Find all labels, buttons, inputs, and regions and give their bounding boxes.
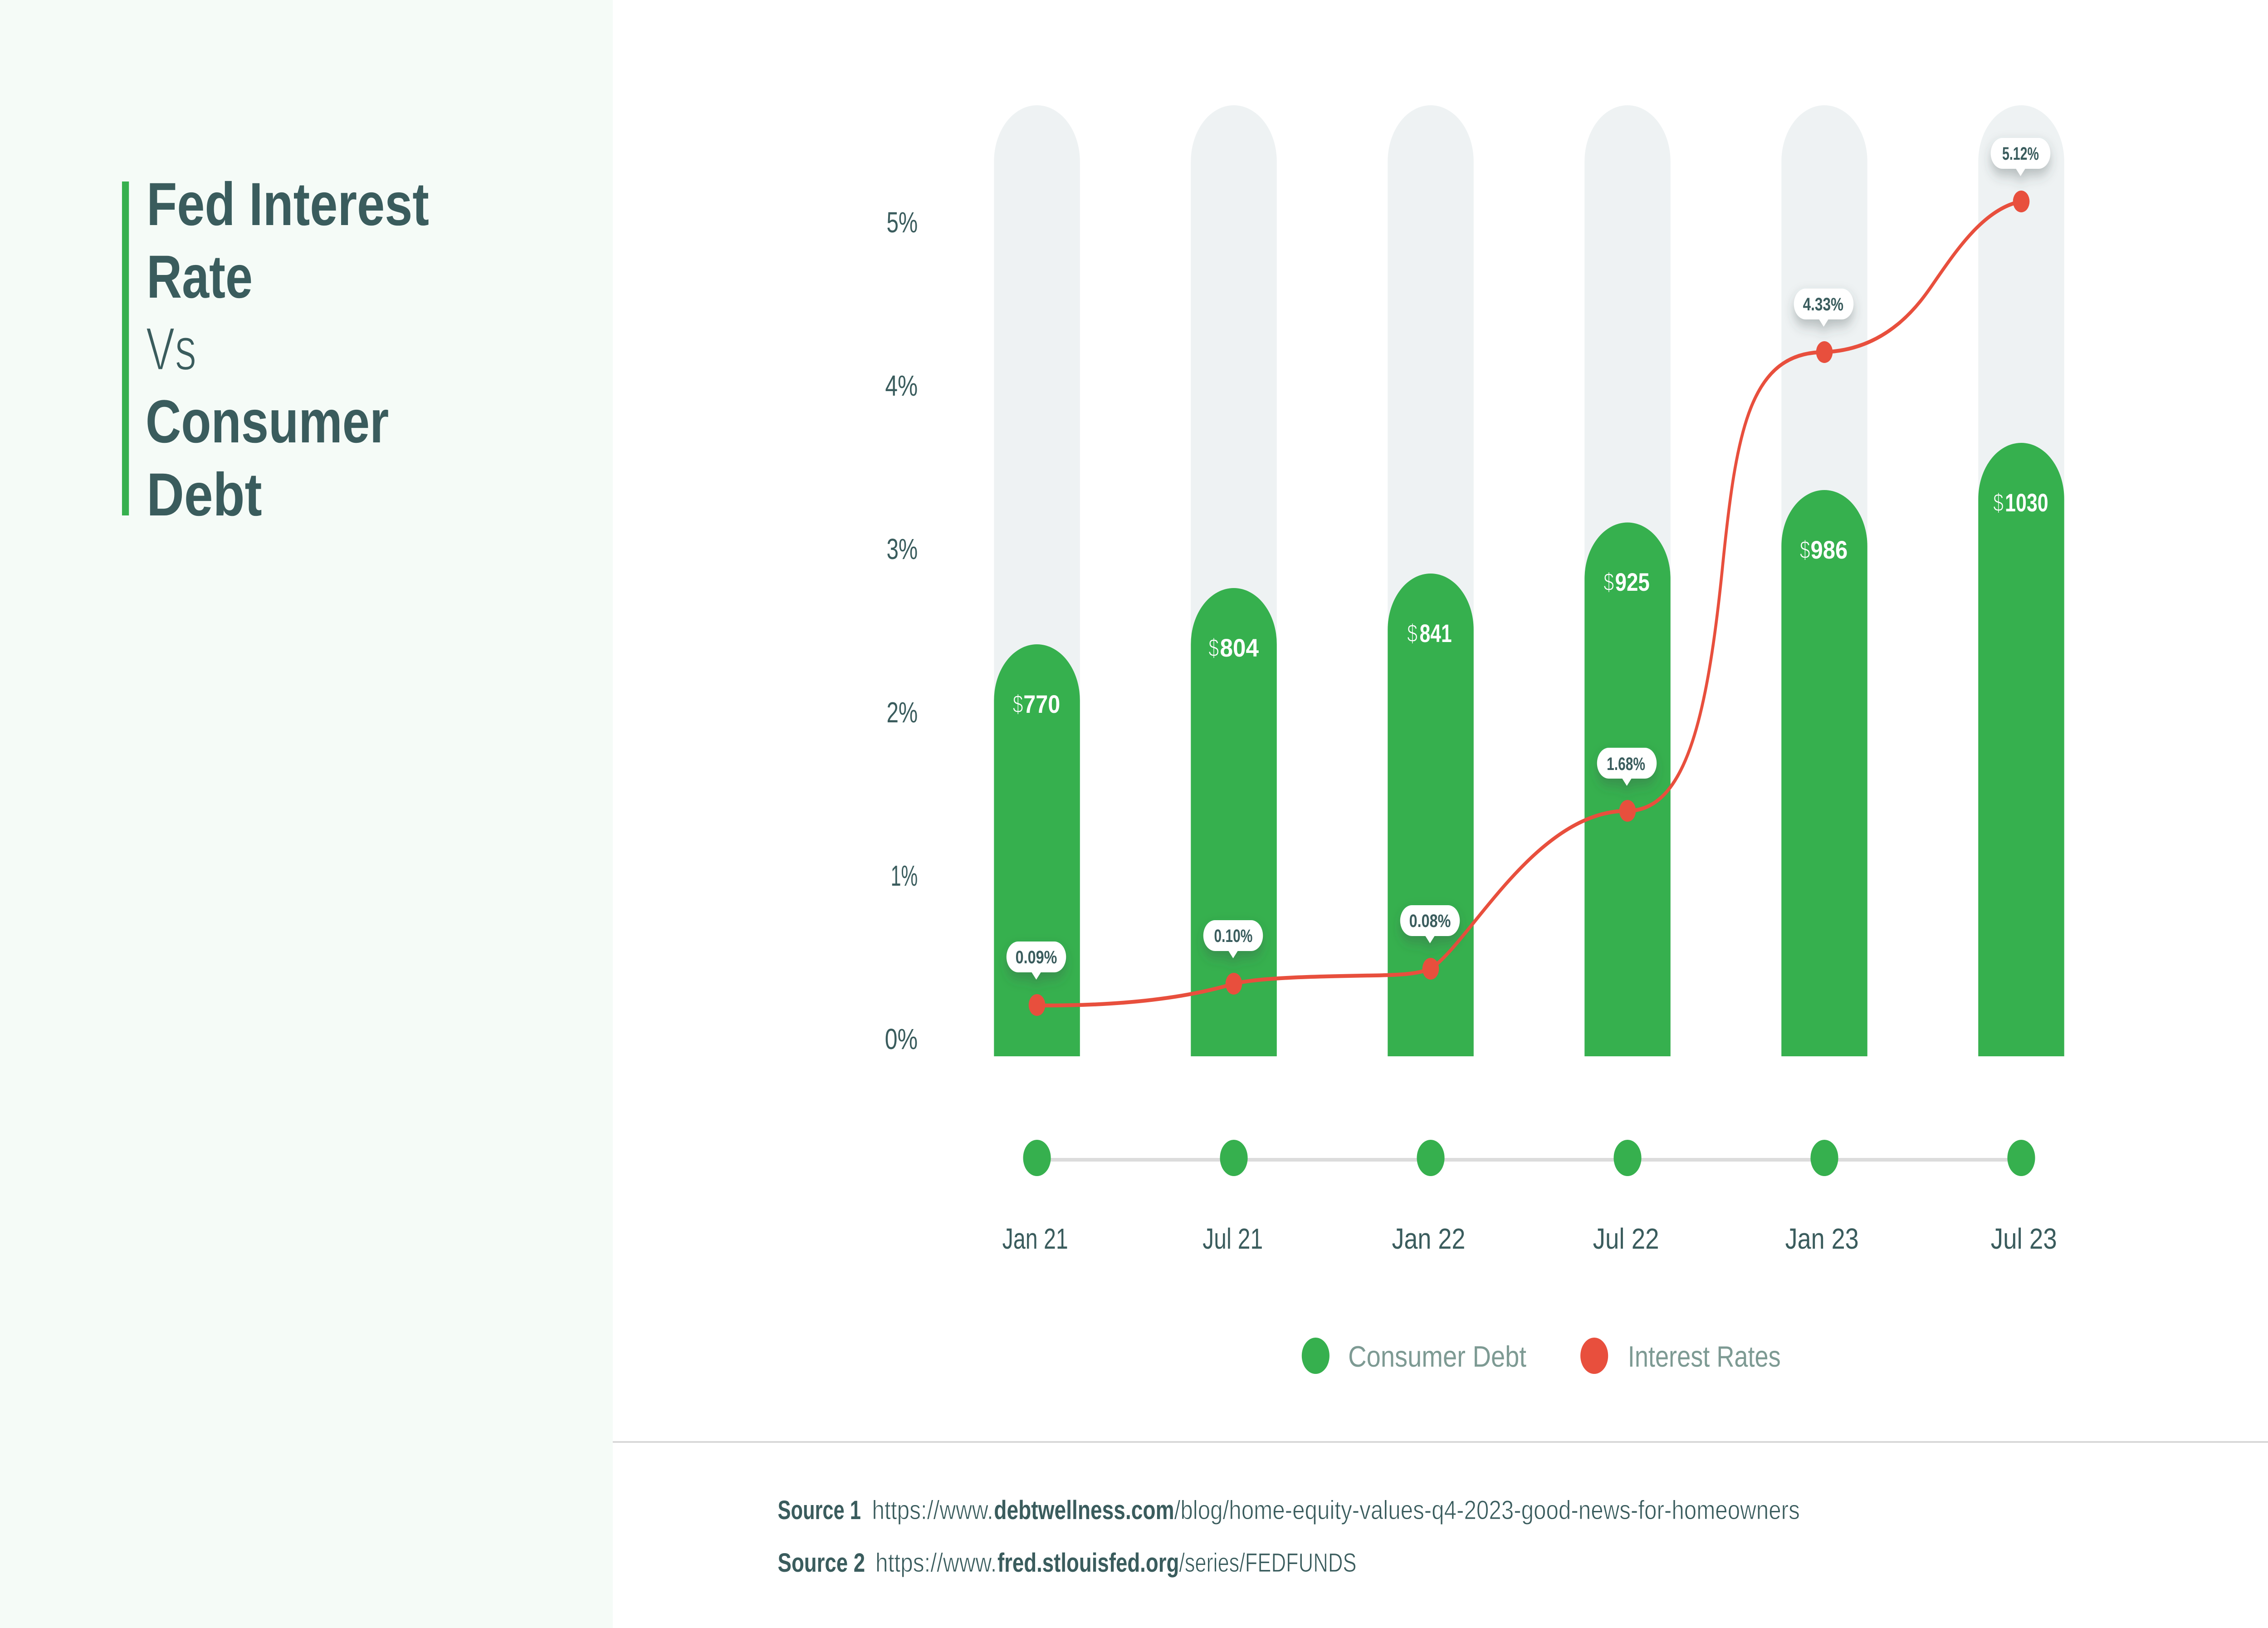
title line: Vs: Vs [146,315,196,383]
bar $925 [1584,523,1671,1056]
callout 4.33%: 4.33% [1803,294,1843,314]
legend icon: consumer debt [1302,1338,1330,1374]
bar value labels [1013,488,2048,718]
value $770: 770 [1023,690,1060,718]
legend icon: interest rates [1580,1338,1608,1374]
date Jul 23: Jul 23 [1991,1223,2057,1255]
value $986: $ [1800,535,1810,564]
capsule Jul 21 [1191,105,1277,1056]
date Jul 21: Jul 21 [1202,1223,1263,1255]
axis label 5%: 5% [886,206,918,239]
title accent bar [122,181,129,515]
axis label 2%: 2% [886,696,918,729]
value $804: $ [1208,633,1219,662]
date Jan 21: Jan 21 [1002,1223,1068,1255]
legend label: interest rates: Interest Rates [1628,1341,1781,1373]
date Jan 23: Jan 23 [1785,1223,1859,1255]
callout 0.09% [1007,941,1066,980]
value $841: $ [1407,619,1418,647]
value $841: 841 [1420,619,1452,647]
point Jan 22 [1422,958,1439,980]
panel: left title sidebar [0,0,613,1628]
callout 4.33% [1794,289,1853,327]
callout 0.10% [1203,920,1263,958]
source 2: Source 2 [778,1548,865,1577]
bar $804 [1191,588,1277,1056]
callout 1.68% [1597,748,1657,786]
value $770: $ [1013,690,1023,718]
bar $986 [1781,490,1867,1056]
source 1 [778,1495,1800,1525]
capsule Jul 23 [1978,105,2064,1056]
point Jul 23 [2013,191,2029,212]
legend label: consumer debt: Consumer Debt [1348,1341,1526,1373]
date Jul 22: Jul 22 [1593,1223,1659,1255]
source 1: Source 1 [778,1495,861,1525]
axis label 4%: 4% [885,370,918,402]
title [122,171,429,529]
value $986: 986 [1810,535,1848,564]
title line: Consumer: Consumer [146,388,389,456]
axis label 0%: 0% [885,1023,918,1056]
capsule Jan 21 [994,105,1080,1056]
x axis date labels [1002,1223,2057,1255]
title line: Debt: Debt [147,461,262,529]
interest rate points [1029,191,2029,1016]
title line: Rate: Rate [147,243,253,311]
axis label 3%: 3% [886,533,918,566]
point Jul 22 [1619,800,1636,822]
capsule Jan 22 [1388,105,1474,1056]
value $925: 925 [1615,568,1650,596]
point Jan 23 [1816,341,1833,363]
title line: Fed Interest: Fed Interest [147,171,429,238]
callout 0.09%: 0.09% [1016,947,1057,967]
background capsule bars [994,105,2064,1056]
value $770 [1013,690,1060,718]
callout 0.08%: 0.08% [1409,911,1451,931]
timeline [1023,1140,2035,1176]
bar $1030 [1978,443,2064,1056]
source 1: https://www. [872,1495,993,1525]
source 2: /series/FEDFUNDS [1179,1548,1357,1577]
capsule Jan 23 [1781,105,1867,1056]
callout 5.12%: 5.12% [2002,143,2039,164]
callout 1.68%: 1.68% [1607,754,1645,774]
axis label 1%: 1% [891,860,918,892]
value $804: 804 [1220,633,1259,662]
value $1030: $ [1993,488,2004,517]
point Jul 21 [1226,973,1242,995]
value $986 [1800,535,1848,564]
bar $841 [1388,574,1474,1056]
source 1: debtwellness.com [994,1495,1174,1525]
interest rate line [1037,201,2021,1005]
source 2: fred.stlouisfed.org [997,1548,1179,1577]
timeline dots [1023,1140,2035,1176]
bar $770 [994,644,1080,1056]
value $804 [1208,633,1259,662]
source 2 [778,1548,1357,1577]
capsule Jul 22 [1584,105,1671,1056]
sources [778,1495,1800,1577]
value $1030: 1030 [2005,488,2048,517]
rate callouts [1007,138,2050,980]
legend [1302,1338,1781,1374]
value $925: $ [1603,568,1614,596]
source 1: /blog/home-equity-values-q4-2023-good-news-for-homeowners [1174,1495,1800,1525]
point Jan 21 [1029,994,1045,1016]
callout 5.12% [1991,138,2050,176]
consumer debt green bars [994,443,2064,1056]
date Jan 22: Jan 22 [1392,1223,1465,1255]
source 2: https://www. [875,1548,997,1577]
callout 0.08% [1400,905,1460,943]
y axis labels [885,206,918,1056]
callout 0.10%: 0.10% [1214,926,1252,946]
